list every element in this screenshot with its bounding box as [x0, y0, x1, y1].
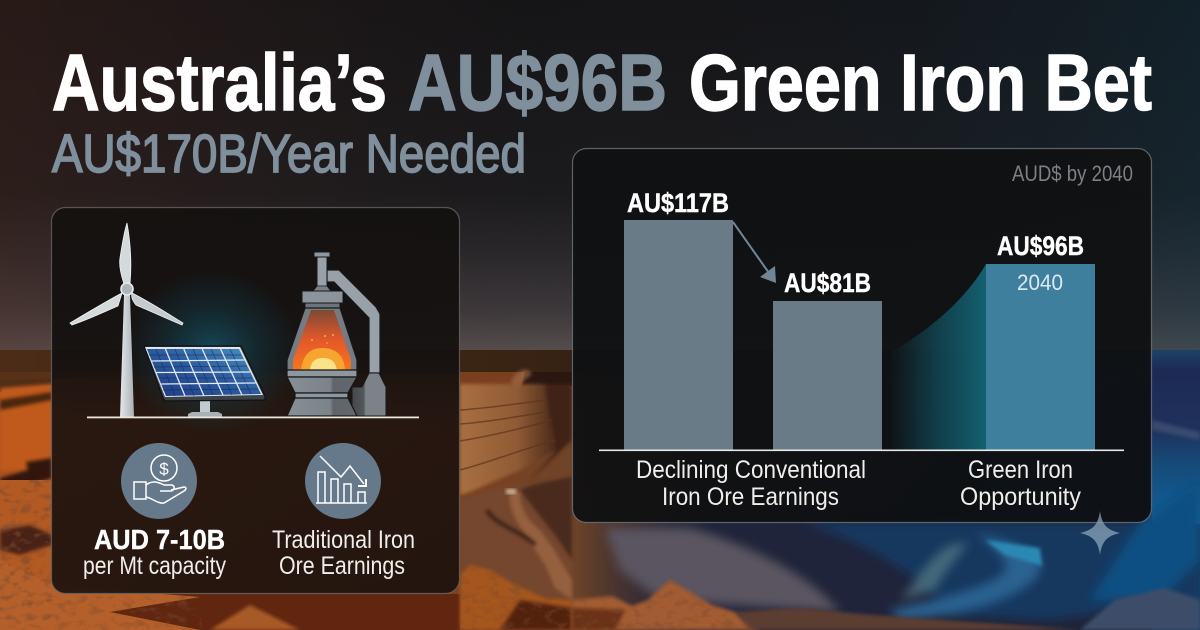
stat: traditional earnings: Ore Earnings: [279, 552, 405, 580]
icon: solar panel: [144, 346, 265, 417]
stat: capital cost: [83, 524, 226, 580]
icon: sparkle: [1080, 511, 1120, 555]
stat: capital cost: per Mt capacity: [83, 552, 226, 580]
panel: clean energy and iron economics: [52, 208, 460, 594]
bar: 96B green iron: [986, 264, 1095, 450]
axis category: conventional: Declining Conventional: [636, 456, 866, 484]
icon: hand holding dollar coin: $: [159, 460, 169, 478]
decline arrow: [733, 222, 776, 283]
stat: traditional earnings: [272, 526, 415, 580]
icon: wind turbine: [70, 223, 183, 417]
value labels: AU$96B: [997, 231, 1084, 261]
background: open-pit mine landscape: [0, 350, 1200, 630]
stat: capital cost: AUD 7-10B: [94, 524, 225, 555]
icon: blast furnace: [287, 252, 386, 416]
green iron growth area: [888, 264, 986, 450]
value labels: [627, 188, 1084, 298]
axis category: green iron: Opportunity: [960, 483, 1081, 511]
stat: traditional earnings: Traditional Iron: [272, 526, 415, 554]
ground line: [87, 416, 419, 418]
axis category: conventional: Iron Ore Earnings: [662, 483, 839, 511]
title: Australia’s: [52, 38, 387, 127]
subtitle: AU$170B/Year Needed: [52, 124, 526, 184]
axis category: green iron: [960, 456, 1081, 511]
value labels: AU$81B: [784, 268, 871, 298]
icon: hand holding dollar coin: [121, 443, 197, 519]
axis line: [599, 450, 1124, 451]
panel: earnings bar chart: [572, 148, 1152, 522]
unit note: AUD$ by 2040: [1012, 161, 1133, 186]
value labels: AU$117B: [627, 188, 729, 218]
bar: 81B: [773, 301, 882, 450]
axis category: green iron: Green Iron: [968, 456, 1073, 484]
year label: 2040: [1017, 270, 1063, 295]
icon: declining bar chart: [305, 443, 381, 519]
title: AU$96B: [408, 38, 667, 127]
background: sky: [0, 0, 1200, 351]
axis category: conventional: [636, 456, 866, 511]
title: [52, 38, 1152, 127]
bar: 117B: [624, 220, 733, 450]
